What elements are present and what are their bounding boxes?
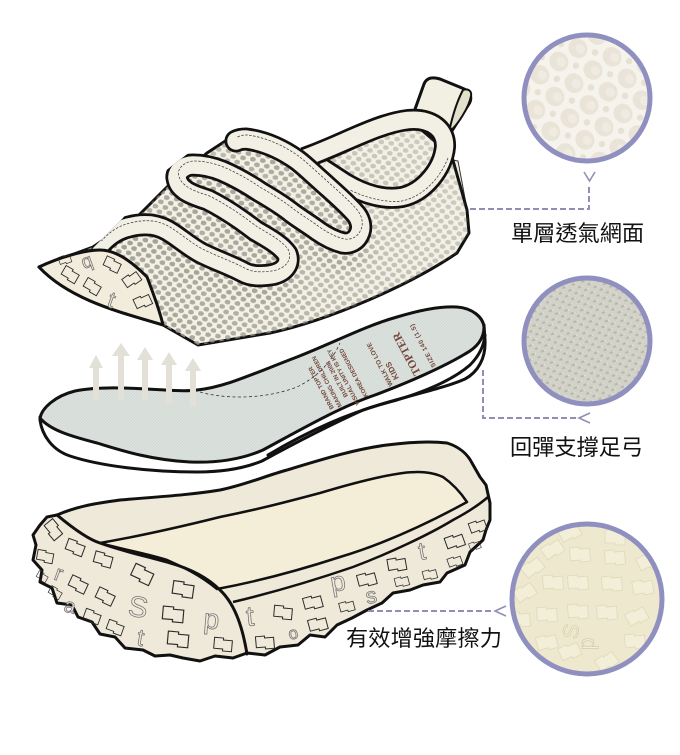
dashed arch line bbox=[200, 343, 340, 397]
connector: outsole bbox=[368, 606, 506, 616]
insole printed text: VISUAL UNITY IS KEY bbox=[327, 348, 362, 406]
outsole letters: s bbox=[364, 582, 379, 609]
insole printed text: WALK TO LOVE bbox=[365, 341, 395, 387]
insole printed text: KIDS bbox=[384, 360, 401, 381]
outsole letters: p bbox=[328, 566, 348, 598]
tread letters bbox=[562, 624, 599, 649]
pull tab bbox=[414, 78, 471, 134]
insole bbox=[40, 307, 485, 472]
circle: outsole tread detail bbox=[509, 521, 662, 674]
outsole letters: r bbox=[51, 560, 67, 586]
outsole letters bbox=[51, 537, 428, 652]
upper velcro strap bbox=[296, 120, 448, 201]
outsole letters: a bbox=[62, 595, 79, 619]
shoe body mesh bbox=[39, 120, 469, 345]
toe cap: t bbox=[104, 286, 120, 313]
outsole letters: o bbox=[286, 623, 300, 644]
insole printed text: BUILT IN 2008 bbox=[325, 359, 350, 398]
insole midsole line bbox=[268, 335, 485, 455]
outsole inner floor bbox=[100, 472, 467, 589]
outsole rim line bbox=[233, 497, 488, 602]
insole printed text bbox=[308, 322, 438, 410]
outsole lugs bbox=[36, 518, 487, 652]
upper shoe bbox=[39, 78, 471, 345]
outsole letters: p bbox=[202, 603, 221, 635]
outsole letters: t bbox=[245, 600, 255, 632]
circle: insole texture detail bbox=[524, 278, 650, 404]
outsole body bbox=[33, 442, 490, 661]
outsole letters: t bbox=[416, 537, 428, 566]
connector: mesh bbox=[470, 172, 595, 209]
insole printed text: BRAND TOPTER bbox=[308, 364, 336, 410]
label: mesh: 單層透氣網面 bbox=[511, 221, 644, 246]
label: outsole: 有效增強摩擦力 bbox=[346, 626, 502, 651]
outsole letters: S bbox=[126, 590, 150, 625]
insole lower layers bbox=[40, 325, 485, 472]
outsole letters: t bbox=[135, 624, 147, 652]
circle: breathable mesh detail bbox=[524, 35, 650, 161]
connector: insole bbox=[483, 370, 590, 423]
insole printed text: SIZE 140 (1.5) bbox=[409, 322, 438, 368]
label: insole: 回彈支撐足弓 bbox=[510, 435, 643, 460]
serpentine velcro strap bbox=[100, 135, 362, 276]
toe cap letters: q bbox=[79, 250, 96, 274]
toe cap bbox=[39, 250, 163, 325]
arrows: breathability bbox=[89, 343, 201, 406]
insole printed text: KOREA DESIGNED bbox=[339, 346, 370, 398]
tread letters: S bbox=[557, 622, 584, 641]
insole printed text: TOPTER bbox=[391, 329, 424, 377]
toe dividing line bbox=[57, 515, 247, 654]
insole printed text: MAKING CHILDREN bbox=[312, 355, 344, 408]
outsole bbox=[33, 442, 490, 661]
tread letters: p bbox=[574, 638, 599, 650]
insole top surface bbox=[40, 307, 484, 462]
side label bbox=[453, 160, 467, 211]
